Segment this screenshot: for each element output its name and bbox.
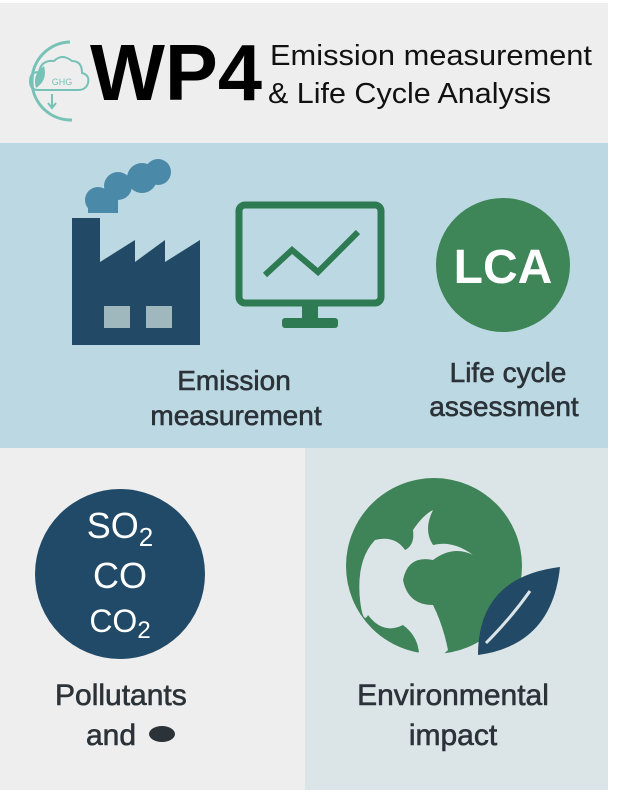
panel: environmental impact [305, 448, 608, 790]
title: WP4: WP4 [90, 28, 263, 117]
header panel: & Life Cycle Analysis [268, 78, 551, 110]
label: environmental impact: Environmental [357, 679, 549, 712]
icon: globe with leaf [346, 478, 560, 665]
icon: pollutant circle [35, 489, 205, 659]
label: emission measurement: Emission [177, 365, 291, 396]
icon: pollutant circle: CO [93, 555, 147, 596]
icon: GHG logo: GHG [52, 77, 72, 87]
icon: factory [72, 159, 200, 345]
icon: pollutant circle: SO [87, 505, 139, 546]
panel: emission measurement & LCA: measurement [150, 400, 322, 431]
icon: pollutant circle: 2 [139, 522, 153, 552]
label: pollutants: Pollutants [55, 679, 187, 712]
icon: pollutant circle: 2 [137, 617, 151, 644]
icon: monitor with chart [239, 205, 381, 328]
icon: GHG logo [30, 42, 88, 120]
label: life cycle assessment: Life cycle [450, 357, 566, 388]
icon: pollutant circle: CO [89, 603, 137, 639]
panel: pollutants [0, 448, 305, 790]
icon: LCA circle [436, 198, 570, 332]
icon: LCA circle: LCA [454, 241, 552, 294]
panel: environmental impact: impact [409, 719, 498, 752]
header panel [0, 3, 608, 143]
panel: emission measurement & LCA [0, 143, 608, 448]
panel: pollutants: and [86, 719, 136, 752]
subtitle: Emission measurement [270, 40, 592, 72]
panel: emission measurement & LCA: assessment [429, 391, 579, 422]
